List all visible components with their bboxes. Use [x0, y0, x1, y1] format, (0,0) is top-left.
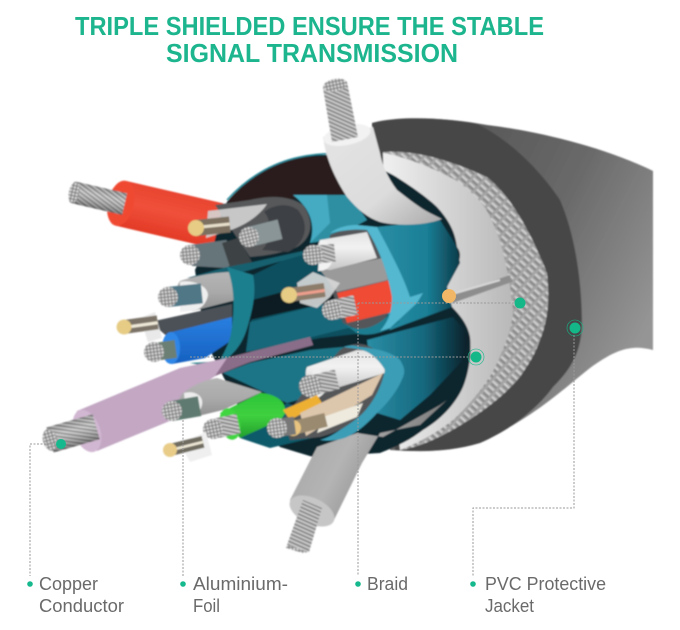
- teal body of lower shield: [367, 317, 470, 420]
- label: copper conductor: Copper: [39, 574, 98, 594]
- light blue band center: [330, 225, 423, 331]
- wire: white top: [321, 77, 442, 225]
- label: aluminium foil: Foil: [193, 596, 220, 616]
- dark arc behind the upper bundle: [227, 156, 372, 205]
- bundle upper left: [179, 195, 367, 268]
- aluminium foil ring: [383, 153, 513, 450]
- jacket cut face: [372, 119, 582, 451]
- label: braid: Braid: [367, 574, 408, 594]
- leader lines: [30, 303, 574, 576]
- title: SIGNAL TRANSMISSION: [166, 38, 458, 68]
- PVC jacket outer surface: [372, 118, 653, 451]
- label: copper conductor: [27, 574, 124, 616]
- title: TRIPLE SHIELDED ENSURE THE STABLE: [75, 11, 544, 41]
- light blue band bottom: [320, 346, 404, 441]
- wire: red large: [64, 169, 223, 248]
- label: pvc protective jacket: [470, 574, 606, 616]
- label: pvc protective jacket: Jacket: [485, 596, 534, 616]
- label: copper conductor: Conductor: [39, 596, 124, 616]
- wire: gray lower: [285, 400, 447, 553]
- bundle bottom: [160, 317, 470, 462]
- teal body right of center shield: [377, 220, 460, 330]
- marker dots: [56, 289, 583, 449]
- label: aluminium foil: [180, 574, 288, 616]
- label: pvc protective jacket: PVC Protective: [485, 574, 606, 594]
- drain wire: [449, 275, 512, 303]
- label: aluminium foil: Aluminium-: [193, 574, 288, 594]
- bundle left: [116, 238, 447, 366]
- teal rim: [227, 154, 345, 200]
- title: [75, 11, 544, 68]
- braid: [383, 152, 548, 450]
- dark teal sheets: [250, 238, 447, 352]
- teal band left: [190, 267, 254, 366]
- wire: purple: [40, 337, 313, 456]
- cable illustration: [40, 77, 653, 553]
- cable interior: [195, 155, 471, 457]
- bundle center: [280, 227, 400, 335]
